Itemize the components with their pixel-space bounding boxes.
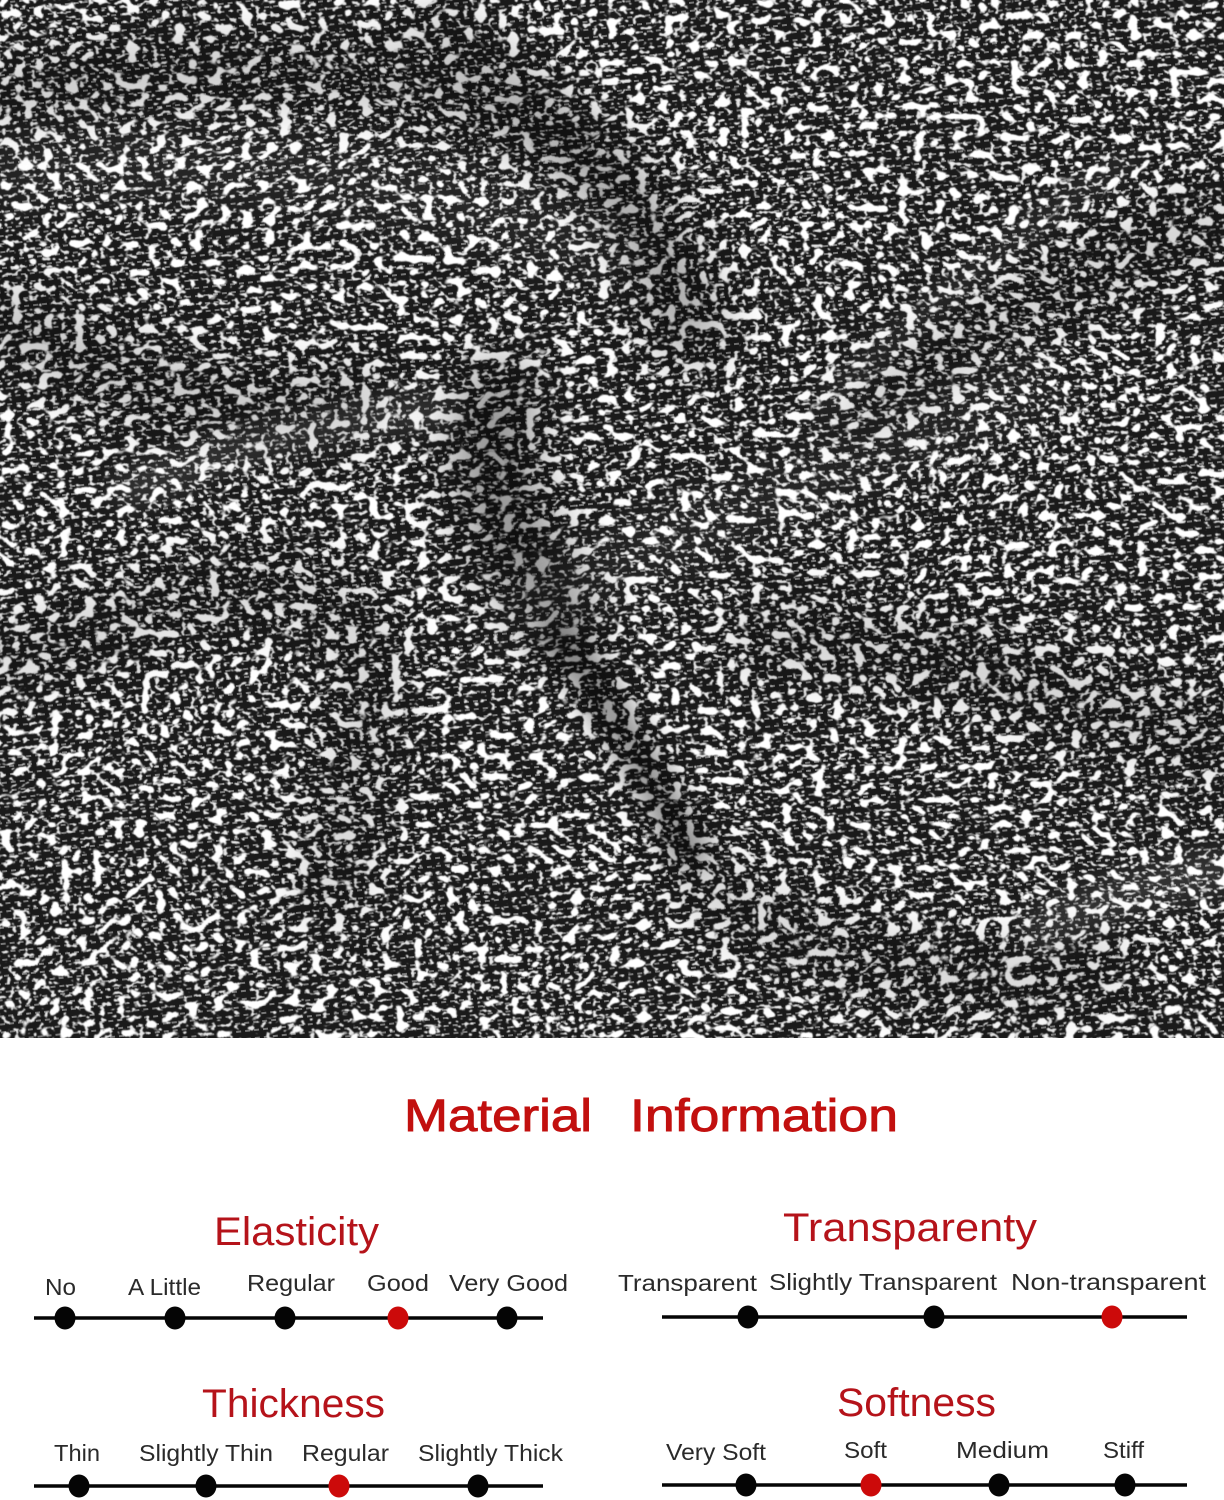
- panel: elasticity: [34, 1210, 568, 1330]
- scale labels: elasticity: [45, 1270, 568, 1300]
- scale labels: elasticity: Good: [367, 1270, 429, 1296]
- scale labels: transparency: [618, 1269, 1207, 1296]
- heading: transparency: Transparenty: [783, 1206, 1037, 1250]
- scale labels: thickness: Slightly Thick: [418, 1440, 563, 1466]
- title: [404, 1090, 898, 1141]
- heading: thickness: Thickness: [202, 1382, 385, 1426]
- scale labels: softness: Medium: [956, 1437, 1049, 1463]
- scale track: elasticity: [34, 1306, 543, 1330]
- scale labels: elasticity: A Little: [128, 1274, 201, 1300]
- panel: softness: [662, 1381, 1187, 1496]
- title: Material: [404, 1090, 592, 1141]
- scale track: thickness: [34, 1474, 543, 1498]
- scale labels: thickness: Thin: [54, 1440, 100, 1466]
- scale track: transparency: [662, 1306, 1187, 1328]
- scale labels: thickness: [54, 1440, 563, 1466]
- scale labels: elasticity: Very Good: [449, 1270, 568, 1296]
- heading: elasticity: Elasticity: [214, 1210, 379, 1254]
- scale labels: thickness: Slightly Thin: [139, 1440, 273, 1466]
- scale labels: softness: [666, 1437, 1144, 1465]
- scale labels: transparency: Slightly Transparent: [769, 1269, 998, 1295]
- scale labels: softness: Stiff: [1103, 1437, 1144, 1463]
- panel: white information area: [0, 1038, 1224, 1500]
- panel: fabric photo: [0, 0, 1224, 1138]
- scale track: softness: [662, 1474, 1187, 1496]
- heading: softness: Softness: [837, 1381, 996, 1425]
- scale labels: transparency: Non-transparent: [1011, 1269, 1207, 1295]
- panel: transparency: [618, 1206, 1207, 1328]
- scale labels: thickness: Regular: [302, 1440, 389, 1466]
- scale labels: transparency: Transparent: [618, 1270, 758, 1296]
- scale labels: elasticity: Regular: [247, 1270, 335, 1296]
- title: Information: [630, 1090, 898, 1141]
- scale labels: softness: Very Soft: [666, 1439, 766, 1465]
- scale labels: softness: Soft: [844, 1437, 887, 1463]
- scale labels: elasticity: No: [45, 1274, 76, 1300]
- panel: thickness: [34, 1382, 563, 1498]
